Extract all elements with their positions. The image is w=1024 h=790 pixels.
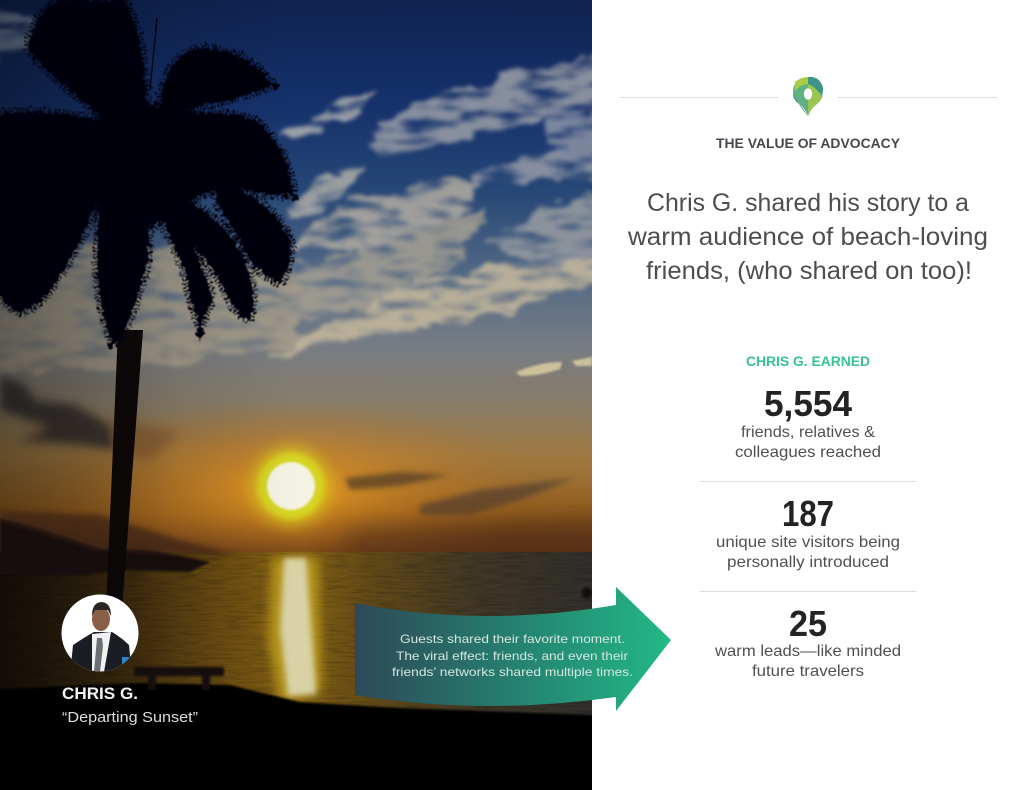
stat: 25 warm leads: warm leads—like minded (714, 643, 901, 660)
person silhouette (582, 588, 592, 598)
heading: chris g. earned: CHRIS G. EARNED (746, 354, 870, 369)
arrow: callout (355, 587, 671, 711)
dark clouds (0, 375, 180, 462)
stat: 5,554 friends reached (735, 383, 881, 461)
icon: portrait avatar (62, 594, 138, 675)
text block: headline: warm audience of beach-loving (627, 223, 988, 251)
stat: 187 unique site visitors (716, 493, 900, 571)
stat: 5,554 friends reached: colleagues reached (735, 444, 881, 461)
stat: 25 warm leads (714, 603, 901, 680)
icon: palm tree (0, 0, 293, 343)
arrow: callout: Guests shared their favorite moment. (400, 632, 625, 646)
sun reflection (268, 558, 322, 704)
sun glow (107, 412, 479, 552)
trunk (106, 330, 143, 610)
vignette (0, 0, 235, 688)
stat: 187 unique site visitors: personally introduced (727, 554, 889, 571)
clouds (0, 5, 610, 372)
distant hill (0, 518, 210, 575)
ground (0, 683, 620, 790)
text block: headline (627, 189, 988, 285)
text block: name and caption: CHRIS G. (62, 685, 138, 703)
text block: headline: friends, (who shared on too)! (646, 257, 972, 285)
stat: 5,554 friends reached: 5,554 (764, 383, 852, 424)
sun (251, 446, 331, 526)
panel: sunset photo (0, 0, 620, 790)
stat: 187 unique site visitors: unique site visitors being (716, 534, 900, 551)
icon: logo pin (793, 77, 823, 116)
stat: 25 warm leads: 25 (789, 603, 827, 644)
text block: name and caption (62, 685, 198, 726)
stat: 5,554 friends reached: friends, relatives & (741, 424, 875, 441)
dividers with logo (620, 96, 997, 98)
heading: the value of advocacy: THE VALUE OF ADVOCACY (716, 135, 901, 151)
arrow: callout: The viral effect: friends, and even their (396, 649, 628, 663)
arrow: callout: friends’ networks shared multiple times. (392, 665, 633, 679)
stat: 187 unique site visitors: 187 (782, 493, 834, 534)
water (0, 552, 592, 722)
text block: headline: Chris G. shared his story to a (647, 189, 969, 217)
stat: 25 warm leads: future travelers (752, 663, 864, 680)
bench (134, 667, 224, 690)
panel: white background (592, 0, 1024, 790)
text block: name and caption: “Departing Sunset” (62, 709, 198, 726)
